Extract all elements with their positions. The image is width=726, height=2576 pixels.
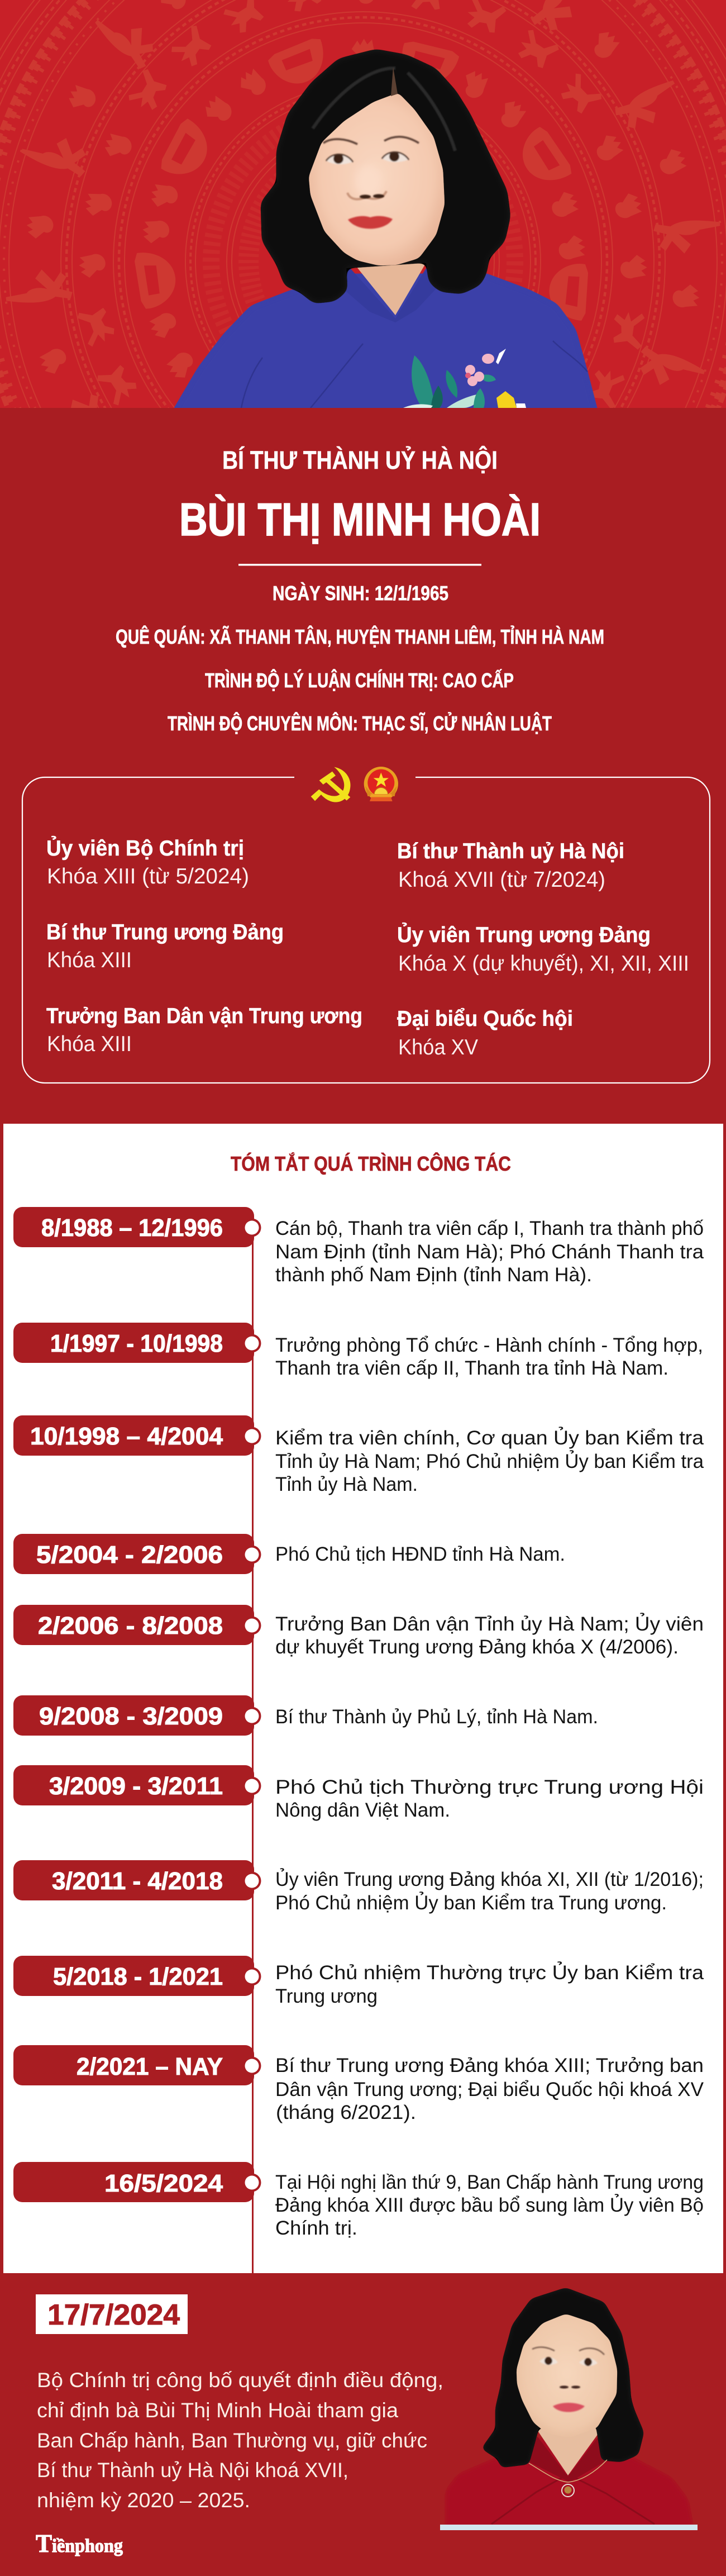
text block: personal details: TRÌNH ĐỘ CHUYÊN MÔN: THẠC SĨ, CỬ NHÂN LUẬT bbox=[168, 711, 552, 735]
timeline item 6: 9/2008 - 3/2009 bbox=[39, 1703, 223, 1730]
timeline item 2: Thanh tra viên cấp II, Thanh tra tỉnh Hà Nam. bbox=[275, 1357, 668, 1379]
timeline item 11: Chính trị. bbox=[275, 2217, 357, 2239]
text block: appointment: Ban Chấp hành, Ban Thường vụ, giữ chức bbox=[37, 2429, 427, 2452]
entry: Mass Mobilisation head: Trưởng Ban Dân vận Trung ương bbox=[46, 1004, 362, 1028]
icon: hammer and sickle bbox=[311, 767, 350, 802]
eyes bbox=[326, 151, 409, 164]
lips bbox=[348, 216, 393, 229]
timeline item 9: Trung ương bbox=[275, 1985, 378, 2007]
timeline item 7: Phó Chủ tịch Thường trực Trung ương Hội bbox=[275, 1776, 704, 1798]
face bbox=[517, 2314, 617, 2437]
timeline item 11 bbox=[13, 2162, 704, 2239]
text block: personal details: TRÌNH ĐỘ LÝ LUẬN CHÍNH TRỊ: CAO CẤP bbox=[205, 668, 514, 692]
heading: name: BÙI THỊ MINH HOÀI bbox=[179, 493, 541, 545]
timeline item 1: 8/1988 – 12/1996 bbox=[41, 1214, 223, 1242]
timeline item 1: Cán bộ, Thanh tra viên cấp I, Thanh tra thành phố bbox=[275, 1218, 704, 1239]
timeline item 3: Tỉnh ủy Hà Nam. bbox=[275, 1474, 418, 1495]
portrait: main photo illustration bbox=[162, 49, 603, 430]
timeline item 8: Phó Chủ nhiệm Ủy ban Kiểm tra Trung ương. bbox=[275, 1891, 667, 1914]
panel: hero background bbox=[0, 0, 726, 408]
timeline item 10: Dân vận Trung ương; Đại biểu Quốc hội khoá XV bbox=[275, 2079, 704, 2100]
panel: positions box bbox=[22, 767, 710, 1083]
timeline item 8 bbox=[13, 1860, 704, 1914]
entry: Mass Mobilisation head: Khóa XIII bbox=[47, 1032, 132, 1056]
timeline item 10: 2/2021 – NAY bbox=[77, 2053, 223, 2080]
timeline item 8: 3/2011 - 4/2018 bbox=[52, 1867, 223, 1895]
entry: Hanoi secretary: Khoá XVII (từ 7/2024) bbox=[398, 868, 605, 892]
icon: national emblem bbox=[364, 767, 398, 801]
text block: appointment: chỉ định bà Bùi Thị Minh Hoài tham gia bbox=[37, 2399, 398, 2422]
timeline item 1: Nam Định (tỉnh Nam Hà); Phó Chánh Thanh tra bbox=[275, 1241, 704, 1263]
timeline item 4: 5/2004 - 2/2006 bbox=[36, 1541, 223, 1569]
timeline item 11: 16/5/2024 bbox=[104, 2170, 223, 2197]
nose bbox=[347, 165, 386, 199]
brows bbox=[323, 137, 419, 144]
drum pattern bbox=[0, 0, 726, 408]
date badge: 17/7/2024 bbox=[47, 2299, 180, 2331]
timeline item 3: Tỉnh ủy Hà Nam; Phó Chủ nhiệm Ủy ban Kiểm tra bbox=[275, 1450, 704, 1472]
timeline item 5: dự khuyết Trung ương Đảng khóa X (4/2006). bbox=[275, 1636, 679, 1658]
timeline item 9: 5/2018 - 1/2021 bbox=[53, 1963, 223, 1990]
face bbox=[309, 93, 445, 265]
timeline item 9 bbox=[13, 1956, 704, 2007]
timeline item 2: 1/1997 - 10/1998 bbox=[50, 1330, 223, 1357]
entry: National Assembly: Khóa XV bbox=[398, 1035, 478, 1059]
timeline item 5: 2/2006 - 8/2008 bbox=[38, 1612, 223, 1639]
neck bbox=[345, 240, 430, 315]
timeline item 3: Kiểm tra viên chính, Cơ quan Ủy ban Kiểm tra bbox=[275, 1427, 704, 1449]
text block: appointment bbox=[37, 2369, 443, 2512]
date badge bbox=[36, 2294, 188, 2334]
text block: personal details: NGÀY SINH: 12/1/1965 bbox=[273, 582, 448, 605]
panel: career timeline bbox=[0, 1124, 726, 2273]
timeline item 8: Ủy viên Trung ương Đảng khóa XI, XII (từ 1/2016); bbox=[275, 1868, 704, 1890]
timeline item 6 bbox=[13, 1695, 598, 1736]
text block: appointment: Bí thư Thành uỷ Hà Nội khoá XVII, bbox=[37, 2459, 348, 2482]
timeline item 10 bbox=[13, 2045, 704, 2123]
entry: National Assembly bbox=[397, 1007, 573, 1059]
hair bbox=[261, 49, 510, 303]
entry: Central Committee bbox=[397, 923, 689, 976]
timeline item 7 bbox=[13, 1765, 704, 1821]
timeline item 9: Phó Chủ nhiệm Thường trực Ủy ban Kiểm tra bbox=[275, 1961, 704, 1984]
heading: career summary: TÓM TẮT QUÁ TRÌNH CÔNG TÁC bbox=[231, 1152, 511, 1175]
timeline axis bbox=[252, 1228, 254, 2273]
text block: appointment: Bộ Chính trị công bố quyết định điều động, bbox=[37, 2369, 443, 2392]
timeline item 5: Trưởng Ban Dân vận Tỉnh ủy Hà Nam; Ủy viên bbox=[275, 1613, 704, 1635]
timeline item 2 bbox=[13, 1323, 703, 1379]
timeline item 1: thành phố Nam Định (tỉnh Nam Hà). bbox=[275, 1264, 592, 1286]
entry: Politburo bbox=[46, 836, 249, 888]
entry: Central Committee: Ủy viên Trung ương Đảng bbox=[397, 923, 651, 947]
logo: Tien Phong: Tiềnphong bbox=[36, 2529, 123, 2558]
timeline item 5 bbox=[13, 1605, 704, 1658]
timeline item 10: Bí thư Trung ương Đảng khóa XIII; Trưởng ban bbox=[275, 2055, 704, 2076]
entry: Politburo: Ủy viên Bộ Chính trị bbox=[46, 836, 244, 861]
divider under name bbox=[238, 564, 481, 565]
embroidered flowers bbox=[403, 349, 526, 408]
timeline item 3: 10/1998 – 4/2004 bbox=[30, 1423, 223, 1450]
text block: appointment: nhiệm kỳ 2020 – 2025. bbox=[37, 2489, 250, 2512]
entry: Secretariat bbox=[46, 920, 284, 972]
timeline item 4 bbox=[13, 1534, 565, 1574]
entry: Central Committee: Khóa X (dự khuyết), XI, XII, XIII bbox=[398, 952, 689, 976]
timeline item 2: Trưởng phòng Tổ chức - Hành chính - Tổng hợp, bbox=[275, 1334, 703, 1356]
timeline item 10: (tháng 6/2021). bbox=[276, 2102, 416, 2123]
portrait: closing photo illustration bbox=[445, 2288, 693, 2542]
panel: identity band bbox=[0, 408, 726, 1124]
entry: Secretariat: Khóa XIII bbox=[47, 948, 132, 972]
timeline item 7: Nông dân Việt Nam. bbox=[275, 1799, 450, 1821]
entry: Politburo: Khóa XIII (từ 5/2024) bbox=[47, 864, 249, 888]
entry: Mass Mobilisation head bbox=[46, 1004, 362, 1056]
entry: Hanoi secretary: Bí thư Thành uỷ Hà Nội bbox=[397, 839, 624, 863]
entry: National Assembly: Đại biểu Quốc hội bbox=[397, 1007, 573, 1031]
light blue base bar bbox=[440, 2525, 698, 2530]
timeline item 4: Phó Chủ tịch HĐND tỉnh Hà Nam. bbox=[275, 1543, 565, 1565]
entry: Secretariat: Bí thư Trung ương Đảng bbox=[46, 920, 284, 944]
ao dai body bbox=[162, 273, 603, 430]
timeline item 7: 3/2009 - 3/2011 bbox=[49, 1772, 223, 1800]
timeline item 11: Đảng khóa XIII được bầu bổ sung làm Ủy viên Bộ bbox=[275, 2194, 704, 2216]
text block: personal details bbox=[116, 582, 604, 735]
panel: closing section bbox=[36, 2288, 698, 2556]
hair bbox=[481, 2288, 644, 2468]
timeline item 11: Tại Hội nghị lần thứ 9, Ban Chấp hành Trung ương bbox=[275, 2171, 704, 2193]
heading: position: BÍ THƯ THÀNH UỶ HÀ NỘI bbox=[222, 446, 498, 474]
timeline item 3 bbox=[13, 1415, 704, 1495]
timeline item 1 bbox=[13, 1207, 704, 1286]
entry: Hanoi secretary bbox=[397, 839, 624, 892]
text block: personal details: QUÊ QUÁN: XÃ THANH TÂN, HUYỆN THANH LIÊM, TỈNH HÀ NAM bbox=[116, 625, 604, 648]
timeline item 6: Bí thư Thành ủy Phủ Lý, tỉnh Hà Nam. bbox=[275, 1706, 598, 1728]
